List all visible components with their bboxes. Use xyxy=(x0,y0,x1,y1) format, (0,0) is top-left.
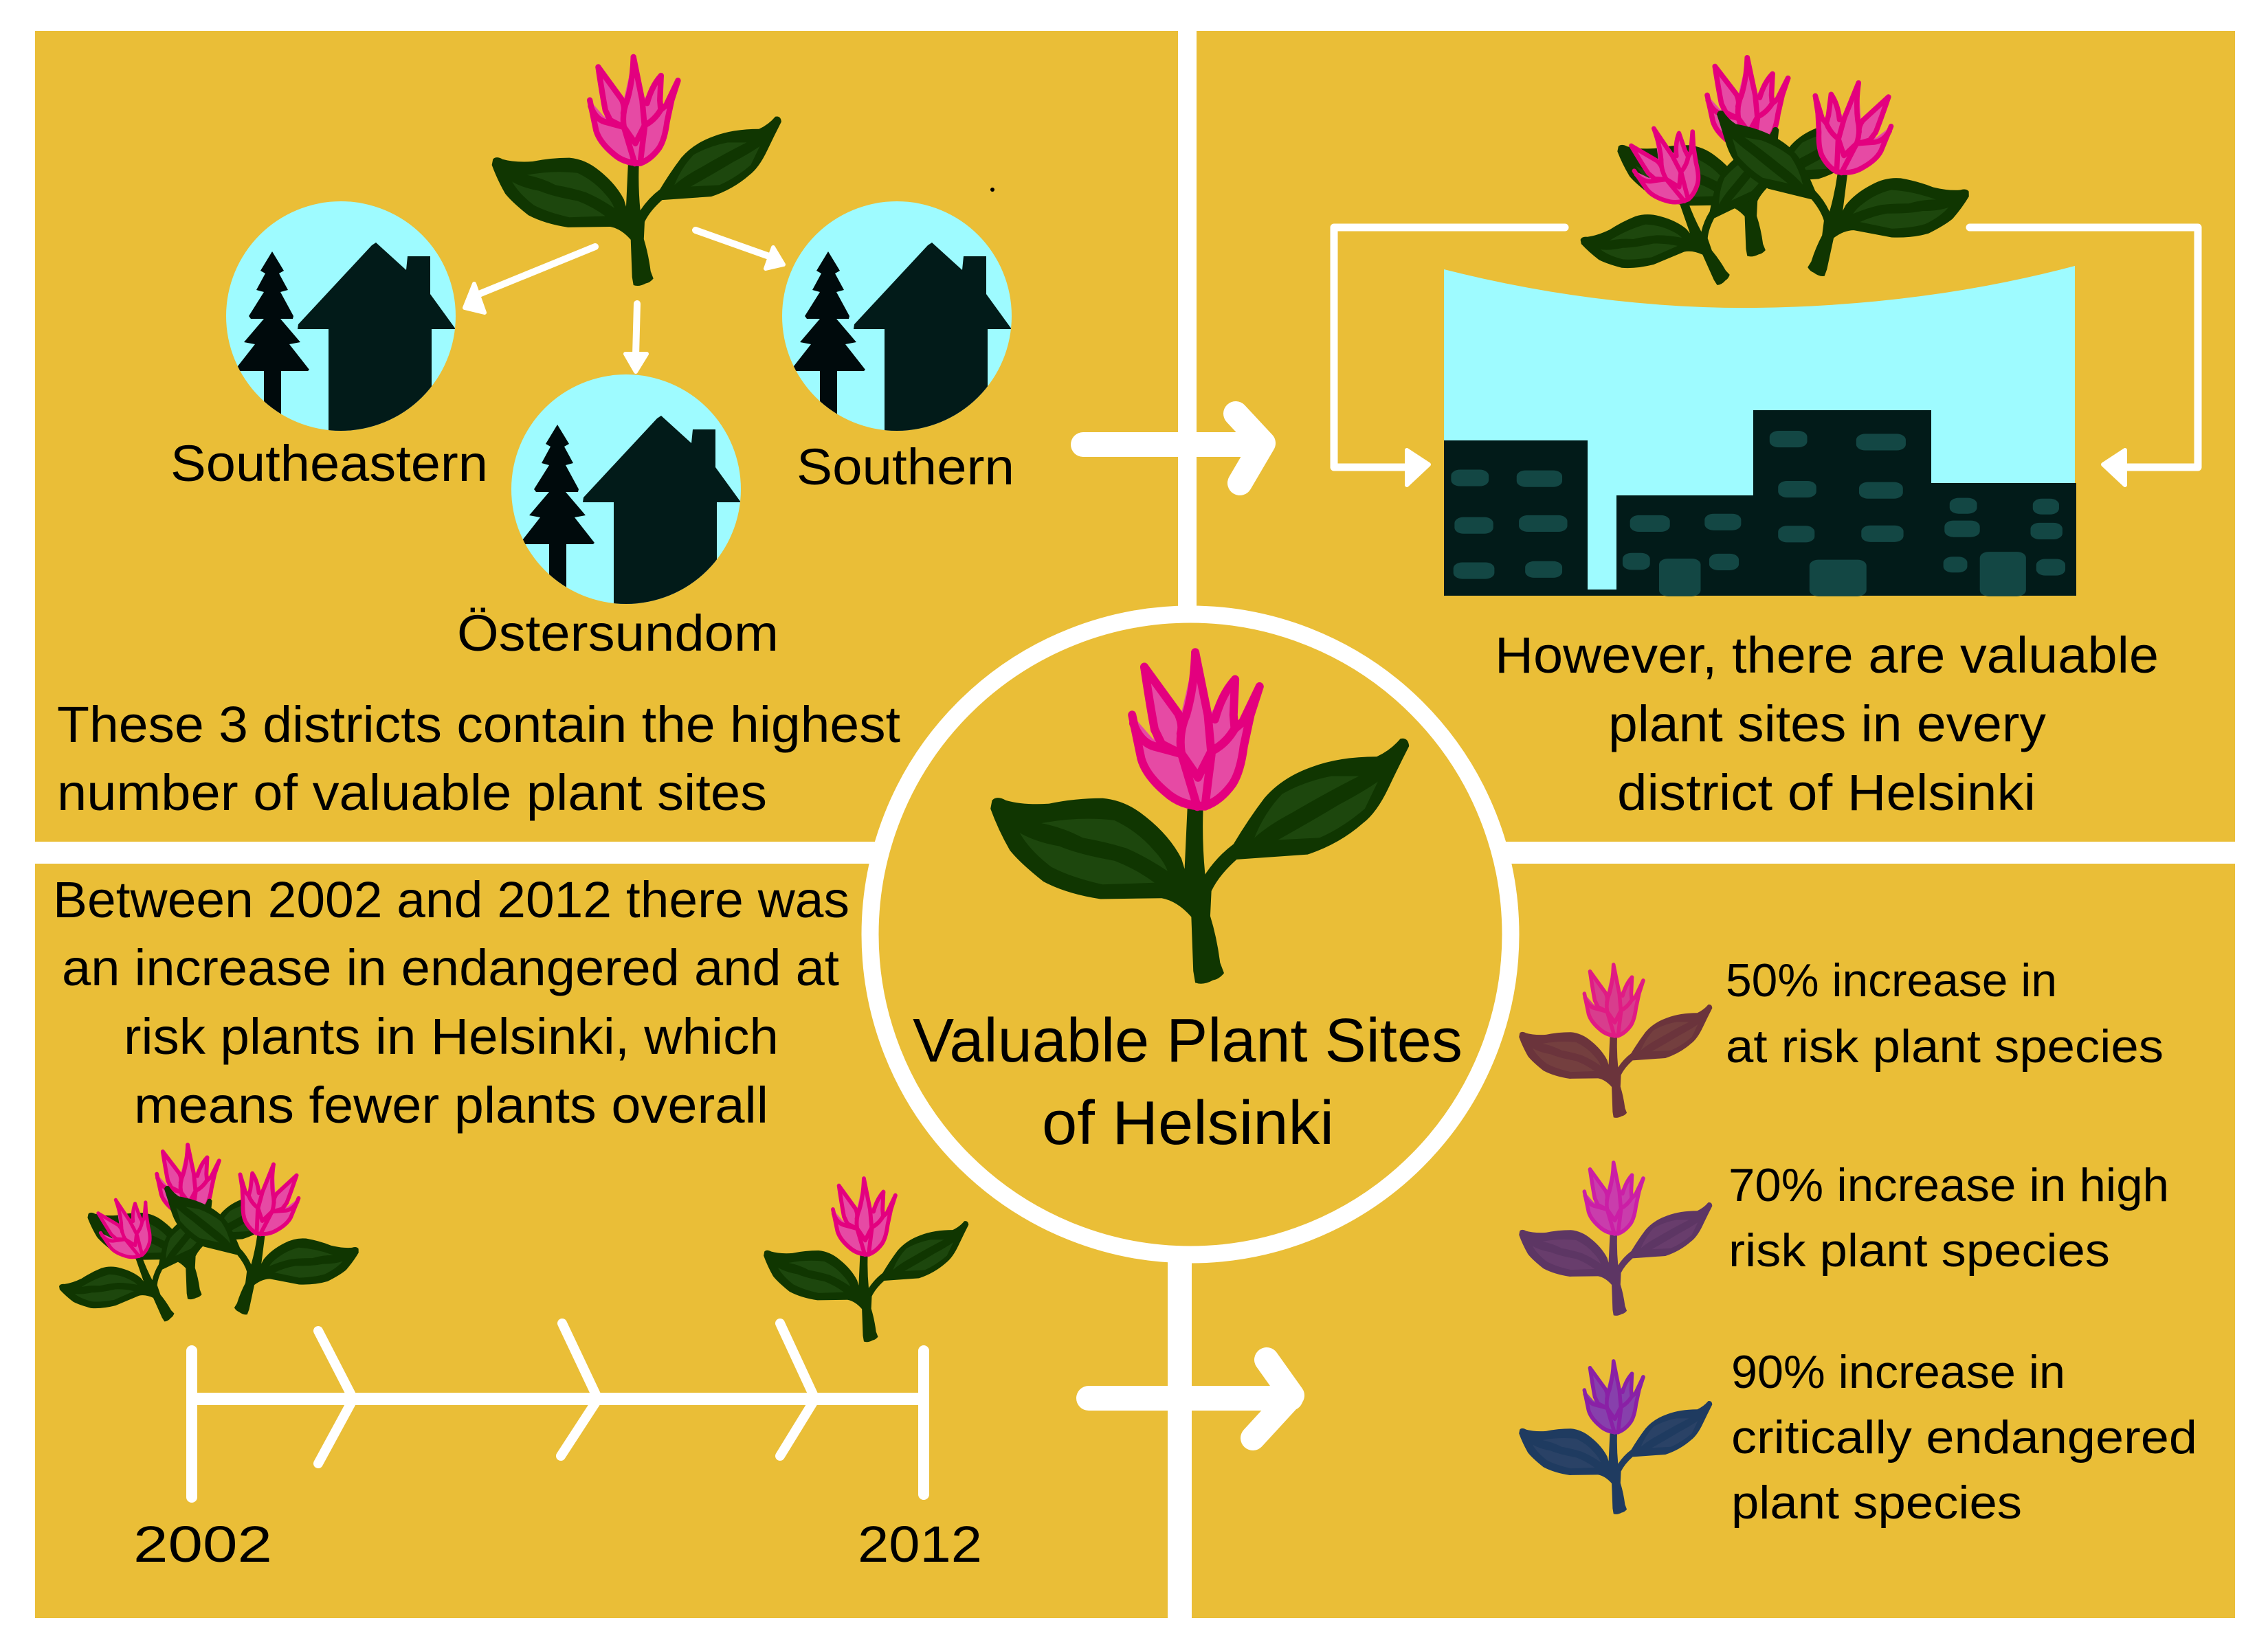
text: increase explanation: risk plants in Helsinki, which xyxy=(124,1008,779,1065)
text: valuable sites everywhere xyxy=(1495,627,2159,821)
arrow: right bracket xyxy=(1970,227,2198,485)
city skyline illustration xyxy=(1444,266,2076,596)
text: 90% increase: plant species xyxy=(1731,1477,2022,1529)
icon: three plants xyxy=(1551,58,1985,327)
title xyxy=(913,1007,1463,1158)
text: 70% increase: 70% increase in high xyxy=(1728,1159,2169,1211)
panel: every district xyxy=(1334,58,2198,821)
arrow: left bracket xyxy=(1334,227,1565,485)
text: highest number of sites: number of valuable plant sites xyxy=(57,764,767,821)
text: increase explanation xyxy=(53,871,849,1134)
icon: single plant 2012 xyxy=(764,1178,968,1342)
arrow: bottom panels xyxy=(1089,1360,1292,1438)
text: 50% increase: 50% increase in xyxy=(1726,954,2057,1007)
arrows: plant to districts xyxy=(465,230,783,372)
icon: three plants 2002 xyxy=(36,1145,371,1354)
icon: central plant xyxy=(990,653,1409,984)
center circle xyxy=(870,614,1511,1255)
panel: three districts xyxy=(57,57,1014,821)
panel: increases xyxy=(1519,954,2197,1529)
text: increase explanation: means fewer plants overall xyxy=(134,1077,768,1134)
text: highest number of sites: These 3 districts contain the highest xyxy=(57,696,900,753)
text: 70% increase: risk plant species xyxy=(1728,1224,2110,1277)
icon: Southern district xyxy=(782,201,1012,433)
title: Valuable Plant Sites xyxy=(913,1007,1463,1075)
label: 2012: 2012 xyxy=(858,1516,982,1573)
icon: high risk plant xyxy=(1519,1163,1712,1316)
timeline arrow xyxy=(192,1323,924,1497)
icon: plant top left xyxy=(492,57,781,286)
text: 90% increase xyxy=(1731,1346,2197,1529)
text: 90% increase: 90% increase in xyxy=(1731,1346,2065,1398)
icon: Southeastern district xyxy=(226,201,456,433)
label: 2002: 2002 xyxy=(133,1516,272,1573)
text: valuable sites everywhere: However, there are valuable xyxy=(1495,627,2159,684)
arrow: top panels xyxy=(1083,414,1263,483)
text: increase explanation: an increase in endangered and at xyxy=(62,939,839,996)
text: valuable sites everywhere: plant sites in every xyxy=(1608,695,2046,752)
text: 70% increase xyxy=(1728,1159,2169,1277)
icon: Ostersundom district xyxy=(511,374,741,606)
label: Östersundom: Östersundom xyxy=(457,605,779,662)
icon: critically endangered plant xyxy=(1519,1361,1712,1514)
icon: at risk plant xyxy=(1519,965,1712,1118)
text: 50% increase: at risk plant species xyxy=(1726,1020,2164,1073)
stray dot xyxy=(990,188,994,192)
text: increase explanation: Between 2002 and 2012 there was xyxy=(53,871,849,928)
text: 50% increase xyxy=(1726,954,2164,1073)
text: 90% increase: critically endangered xyxy=(1731,1411,2197,1463)
panel: timeline xyxy=(36,871,982,1573)
label: Southern: Southern xyxy=(797,438,1014,495)
text: valuable sites everywhere: district of Helsinki xyxy=(1617,764,2036,821)
text: highest number of sites xyxy=(57,696,900,821)
label: Southeastern: Southeastern xyxy=(170,435,488,492)
title: of Helsinki xyxy=(1042,1089,1334,1158)
